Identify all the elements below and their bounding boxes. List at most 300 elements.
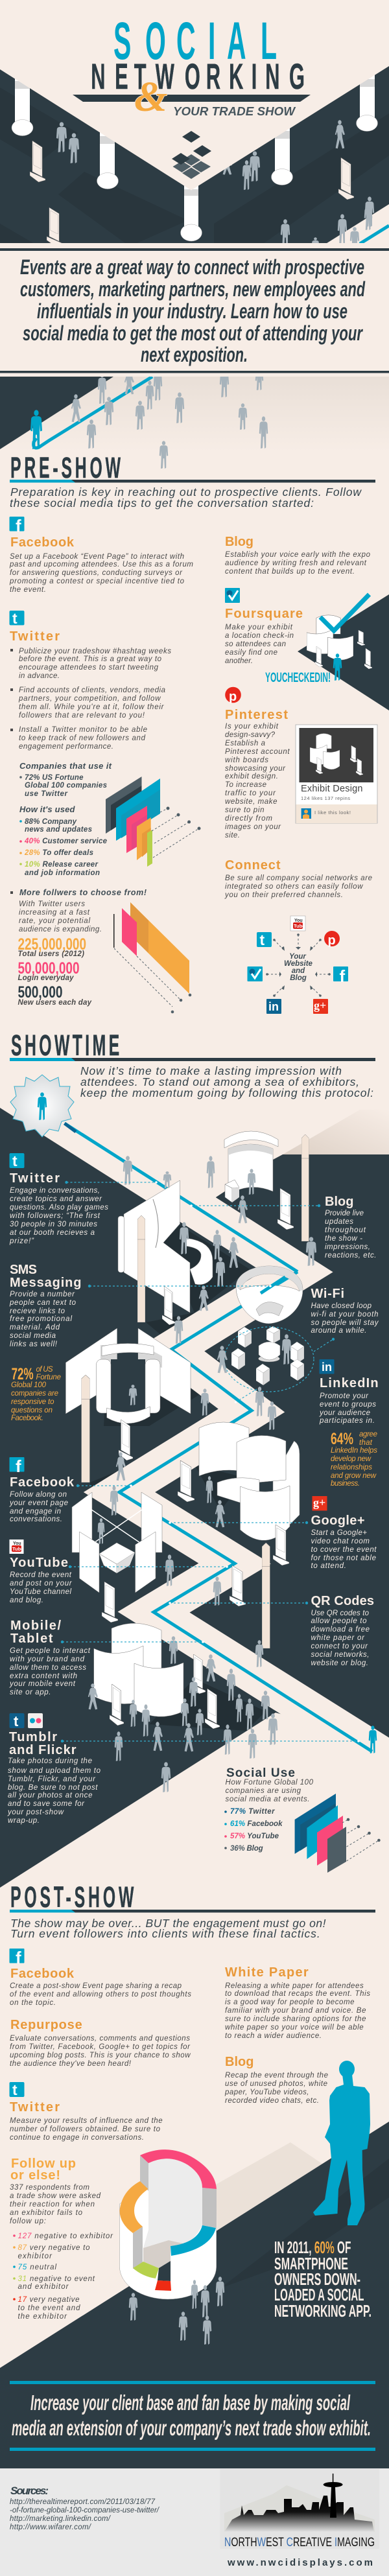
twitter tip: to keep track of new followers and (19, 734, 146, 742)
twitter tip: engagement performance. (19, 743, 113, 751)
social use stats: 77% Twitter (230, 1808, 275, 1816)
footer panel (0, 2468, 389, 2576)
showtime blog callout: the show - (325, 1235, 362, 1243)
social use stats: companies are using (226, 1787, 301, 1795)
icon: linkedin: in (322, 1361, 332, 1374)
icon: youtube showtime: Tube (12, 1546, 23, 1552)
post-show blog tip: paper, YouTube videos, (224, 2089, 309, 2096)
stat: 72 percent (11, 1365, 61, 1422)
pinterest tip: Pinterest account (225, 748, 290, 756)
pinterest tip: images on your (225, 823, 281, 831)
showtime wifi callout: so people will stay (311, 1319, 379, 1327)
pinterest tip: website, make (225, 798, 277, 806)
hero cream ceiling (0, 1, 389, 191)
stat: 72 percent: companies are (11, 1390, 58, 1398)
twitter growth stats: 225,000,000 (18, 935, 86, 954)
showtime mobile callout: Tablet (10, 1632, 53, 1646)
showtime blog callout: Blog (325, 1195, 354, 1209)
repurpose tip (10, 2018, 191, 2068)
twitter growth stats: 500,000 (18, 983, 62, 1001)
foursquare tip: Make your exhibit (225, 624, 293, 631)
how it's used: 88% Company (25, 818, 77, 826)
connect diagram (248, 916, 348, 1014)
stat: 60 percent smartphone owners: IN 2011, 60% OF (274, 2238, 351, 2257)
showtime QR callout: download a free (311, 1626, 370, 1633)
how it's used (19, 804, 108, 877)
showtime tumblr callout: and Flickr (9, 1743, 77, 1757)
pinterest tip: Establish a (225, 740, 265, 747)
showtime SMS callout: recieve links to (10, 1307, 65, 1315)
social use stats: 36% Blog (230, 1845, 263, 1853)
post-show blog tip: recorded video chats, etc. (225, 2097, 319, 2105)
showtime youtube callout: and post on your (10, 1580, 73, 1587)
showtime mobile callout: Get people to interact (10, 1647, 91, 1655)
closing statement (10, 2381, 375, 2451)
connect diagram: t (259, 931, 265, 948)
crowd below band (71, 369, 268, 469)
blog tip: Blog (225, 535, 253, 549)
showtime google plus callout: video chat room (311, 1538, 370, 1545)
logo: diamonds (172, 131, 211, 179)
title: & (134, 73, 167, 121)
stat: 64 percent: agree (359, 1431, 377, 1438)
post-show facebook tip: of the event and allowing others to post thoughts (10, 1991, 191, 1998)
showtime twitter callout (9, 1171, 108, 1245)
showtime intro (80, 1064, 373, 1099)
sources (10, 2485, 160, 2531)
post-show facebook tip: Create a post-show Event page sharing a recap (10, 1982, 182, 1990)
follow up legend: 17 very negative (18, 2296, 79, 2304)
connect diagram: Website (284, 960, 313, 968)
twitter tip: encourage attendees to start tweeting (19, 664, 159, 672)
showtime facebook callout (9, 1475, 75, 1523)
white paper tip: to download that recaps the event. This (225, 1990, 370, 1998)
twitter tip: Find accounts of clients, vendors, media (19, 686, 165, 694)
twitter tip: Install a Twitter monitor to be able (19, 726, 147, 734)
stat: 72 percent: Facebook. (11, 1414, 43, 1422)
pinterest tip: traffic to your (225, 790, 276, 797)
social use stats: 57% YouTube (230, 1832, 279, 1840)
showtime mobile callout: extra content with (10, 1672, 77, 1680)
main booth with curved counter (118, 1180, 213, 1325)
white paper tip: Releasing a white paper for attendees (225, 1982, 364, 1990)
showtime twitter callout: with followers; “The first (10, 1212, 100, 1220)
isometric bar chart: users (113, 902, 191, 1013)
showtime mobile callout (9, 1619, 91, 1696)
follow up text: follow up: (10, 2218, 46, 2225)
wifi ring (236, 1266, 303, 1324)
post-show intro: Turn event followers into clients with these final tactics. (10, 1927, 320, 1940)
follow up legend: 87 very negative to (18, 2244, 90, 2252)
social use stats: 61% Facebook (230, 1820, 283, 1828)
isometric bar chart: social use (295, 1794, 381, 1873)
companies that use it: 72% US Fortune (25, 774, 84, 782)
companies that use it: use Twitter (25, 790, 68, 798)
showtime twitter callout: at our booth recieves a (10, 1229, 95, 1237)
showtime QR callout: white paper or (311, 1634, 365, 1642)
icon: pinterest: p (229, 690, 237, 704)
connect diagram: p (328, 933, 336, 948)
follow up legend: and exhibitor (18, 2283, 69, 2291)
pinterest tip: directly from (225, 815, 272, 823)
showtime facebook callout: Facebook (10, 1475, 75, 1490)
pinterest tip: Pinterest (225, 708, 288, 722)
follow up text: or else! (10, 2168, 60, 2183)
social use stats: How Fortune Global 100 (226, 1779, 314, 1786)
stat: 72 percent: Global 100 (11, 1381, 47, 1389)
stat: 64 percent: relationships (331, 1464, 372, 1471)
heading: Pre-Show: PRE-SHOW (10, 451, 121, 484)
heading: Post-Show: POST-SHOW (10, 1880, 134, 1914)
post-show twitter tip: Twitter (10, 2100, 60, 2114)
blue attendee at end of path (369, 1726, 377, 1753)
showtime tumblr callout: Take photos during the (8, 1757, 92, 1765)
stat: 72 percent: questions on (11, 1407, 53, 1414)
follow up text: a trade show were asked (10, 2192, 101, 2200)
pinterest tip: design-savvy? (225, 731, 276, 739)
repurpose tip: the audience they've been heard! (10, 2060, 132, 2068)
google plus booth (178, 1422, 300, 1648)
showtime youtube callout (10, 1556, 73, 1604)
hero lower right cream floor and blue path (325, 204, 389, 244)
showtime tumblr callout (7, 1730, 101, 1825)
icon: foursquare (225, 588, 240, 603)
showtime mobile callout: allow them to access (10, 1664, 86, 1672)
connect diagram: You (294, 919, 303, 923)
showtime youtube callout: YouTube channel (10, 1588, 71, 1596)
twitter growth stats (10, 888, 147, 1007)
connect tip: Connect (225, 858, 281, 872)
intro band: next exposition. (141, 343, 248, 366)
dotted callout connectors (61, 1181, 360, 1742)
sources: -of-fortune-global-100-companies-use-twitter/ (10, 2507, 160, 2514)
showtime QR callout: QR Codes (311, 1594, 374, 1608)
pre-show intro: Preparation is key in reaching out to prospective clients. Follow (10, 486, 362, 498)
facebook tip: promoting a contest or special incentive tied to (9, 578, 185, 585)
showtime twitter callout: 30 people in 30 minutes (10, 1221, 97, 1228)
showtime mobile callout: site or app. (10, 1689, 51, 1696)
showtime youtube callout: Record the event (10, 1571, 72, 1579)
repurpose tip: Evaluate conversations, comments and questions (10, 2035, 190, 2043)
pre-show intro: these social media tips to get the conversation started: (10, 497, 314, 509)
showtime linkedin callout: Promote your (320, 1392, 369, 1400)
how it's used: How it's used (19, 804, 76, 814)
showtime twitter callout: prize!” (9, 1237, 34, 1245)
showtime youtube callout: and blog. (10, 1597, 43, 1604)
icon: facebook (9, 516, 25, 535)
stat: 72 percent: 72% (12, 1365, 34, 1383)
connect diagram: Blog (290, 974, 307, 982)
icon: twitter (9, 610, 25, 627)
floor shadows (90, 1225, 266, 1731)
twitter growth stats: audience is expanding. (19, 926, 102, 933)
icon: youtube showtime: You (13, 1541, 21, 1546)
connect diagram: g+ (314, 999, 326, 1012)
blog tip (225, 535, 371, 576)
connect tip: integrated so others can easily follow (225, 883, 363, 891)
showtime blog callout: updates (325, 1218, 353, 1226)
connect diagram: Your (289, 953, 306, 961)
foursquare tip: Foursquare (225, 607, 303, 621)
showtime SMS callout: free promotional (10, 1315, 72, 1323)
stat: 72 percent: of US (36, 1366, 53, 1374)
white paper tip: White Paper (225, 1965, 309, 1980)
repurpose tip: upcoming blog posts. This is your chance to show (10, 2052, 191, 2059)
companies that use it: Global 100 companies (25, 782, 107, 790)
connect tip: Be sure all company social networks are (225, 874, 372, 882)
showtime tumblr callout: Tumblr, Flickr, and your (8, 1775, 96, 1783)
white paper tip: is a good way for people to become (225, 1998, 354, 2006)
showtime SMS callout: links as well! (10, 1341, 58, 1348)
sources: Sources: (10, 2485, 49, 2497)
icon: linkedin (319, 1359, 335, 1374)
follow up legend: exhibitor (18, 2253, 53, 2260)
showtime SMS callout: Messaging (10, 1276, 82, 1290)
follow up text: their reaction for when (10, 2201, 95, 2208)
showtime tumblr callout: and to save some for (8, 1800, 85, 1808)
twitter tip: partners, your competition, and follow (18, 695, 161, 703)
follow up legend: 75 neutral (18, 2264, 56, 2271)
showtime twitter callout: Twitter (10, 1171, 60, 1186)
showtime blog callout: throughout (325, 1226, 366, 1234)
post-show twitter tip: number of followers obtained. Be sure to (10, 2125, 161, 2133)
icon: facebook showtime: f (16, 1457, 21, 1476)
showtime attendees (88, 1156, 316, 1792)
post-show blog tip: use of unused photos, white (225, 2080, 327, 2088)
heading: Showtime (10, 1029, 375, 1062)
facebook tip: Facebook (10, 535, 75, 550)
showtime SMS callout: material. Add (10, 1324, 60, 1331)
start badge (10, 1075, 74, 1137)
follow up text: Follow up (11, 2157, 76, 2171)
icon: youtube showtime (9, 1540, 23, 1554)
follow up legend: 127 negative to exhibitor (18, 2232, 113, 2240)
follow up text: 337 respondents from (10, 2184, 89, 2192)
blue attendee (30, 410, 42, 449)
white paper tip: familiar with your brand and voice. Be (225, 2007, 366, 2015)
twitter tip: in advance. (19, 672, 60, 680)
showtime intro: keep the momentum going by following this protocol: (80, 1086, 373, 1099)
showtime QR callout: social networks, (311, 1651, 370, 1659)
stat: 64 percent: develop new (331, 1455, 371, 1463)
showtime google plus callout: Start a Google+ (311, 1529, 367, 1537)
icon: facebook: f (16, 516, 21, 535)
lower hero floor below band (0, 377, 389, 451)
stat: 64 percent: business. (331, 1480, 360, 1488)
connect diagram: Tube (294, 923, 305, 929)
blue journey line (65, 1123, 372, 1751)
pinterest tip: with boards (225, 756, 268, 764)
follow up legend (13, 2232, 113, 2321)
title: NETWORKING (91, 56, 305, 97)
cylinder donut chart (119, 2149, 217, 2299)
repurpose tip: from Twitter, Facebook, Google+ to get topics for (10, 2043, 191, 2051)
icon: google plus: g+ (313, 1496, 325, 1509)
showtime google plus callout: to attend. (311, 1562, 346, 1570)
intro band (0, 243, 389, 377)
blue figure silhouette (313, 2061, 370, 2225)
post-show blog tip: Recap the event through the (225, 2072, 328, 2079)
facebook tip: for answering questions, conducting surveys or (10, 569, 183, 577)
showtime linkedin callout: your audience (319, 1409, 370, 1417)
title: YOUR TRADE SHOW (173, 105, 296, 118)
connect diagram: and (292, 967, 305, 975)
sources: http://marketing.linkedin.com/ (10, 2515, 112, 2523)
showtime tumblr callout: Tumblr (9, 1730, 57, 1744)
hero floor: dark exhibit hall (0, 58, 389, 246)
showtime wifi callout: Have closed loop (311, 1302, 372, 1310)
showtime QR callout: Use QR codes to (311, 1610, 370, 1617)
showtime twitter callout: Engage in conversations, (10, 1187, 100, 1195)
showtime QR callout: website or blog. (311, 1659, 368, 1667)
blog tip: Establish your voice early with the expo (225, 551, 371, 559)
showtime wifi callout: around a while. (311, 1327, 367, 1335)
showtime google plus callout: for those not able (311, 1554, 376, 1562)
sources: http://therealtimereport.com/2011/03/18/77 (10, 2498, 156, 2506)
icon: facebook showtime (9, 1457, 25, 1476)
showtime facebook callout: your event page (9, 1499, 68, 1507)
showtime tumblr callout: all your photos at once (8, 1792, 92, 1799)
post-show blog tip (224, 2055, 328, 2105)
showtime QR callout: allow people to (311, 1617, 367, 1625)
twitter growth stats: More follwers to choose from! (19, 888, 147, 897)
foursquare tip: easily find one (225, 649, 277, 657)
twitter growth stats: 50,000,000 (18, 959, 79, 978)
pinterest tip: site. (225, 832, 240, 839)
cream zigzag aisle (0, 1083, 389, 1776)
pinterest card: I like this look! (314, 810, 351, 815)
showtime intro: attendees. To stand out among a sea of exhibitors, (80, 1075, 359, 1088)
twitter growth stats: Login everyday (18, 974, 74, 982)
showtime blog callout: impressions, (325, 1243, 370, 1251)
stat: 60 percent smartphone owners (274, 2238, 371, 2321)
stat: 64 percent: LinkedIn helps (331, 1447, 377, 1455)
showtime blog callout: Provide live (325, 1210, 364, 1217)
twitter growth stats: New users each day (18, 999, 92, 1007)
showtime wifi callout (311, 1287, 379, 1335)
facebook tip: Set up a Facebook “Event Page” to interact with (10, 553, 184, 561)
wifi lounge seating (224, 1326, 314, 1392)
post-show intro: The show may be over... BUT the engagement must go on! (10, 1917, 326, 1930)
blog tip: audience by writing fresh and relevant (225, 559, 367, 567)
stat: 64 percent (331, 1430, 377, 1488)
heading: Pre-Show (10, 451, 375, 484)
showtime SMS callout: people can text to (9, 1299, 77, 1307)
mobile booth (94, 1623, 220, 1729)
follow up text (10, 2157, 101, 2225)
how it's used: 28% To offer deals (24, 849, 93, 857)
pinterest tip: To increase (225, 781, 266, 789)
twitter tip: Publicize your tradeshow #hashtag weeks (19, 648, 171, 655)
post-show facebook tip: on the topic. (10, 1999, 56, 2007)
stat: 64 percent: 64% (331, 1430, 353, 1448)
how it's used: 10% Release career (25, 861, 99, 869)
icon: twitter post-show: t (12, 2081, 18, 2098)
twitter tip: them all. While you're at it, follow their (19, 703, 165, 711)
twitter tip: followers that are relevant to you! (19, 712, 145, 720)
social use stats: social media at events. (226, 1796, 310, 1803)
blog booth and column (224, 1131, 309, 1241)
hero pillars and banner stands (12, 68, 377, 246)
icon: twitter post-show (9, 2081, 25, 2098)
icon: twitter: t (12, 610, 18, 627)
repurpose tip: Repurpose (10, 2018, 82, 2032)
white paper tip: sure to include sharing options for the (225, 2015, 366, 2023)
pinterest card: 124 likes 137 repins (301, 795, 350, 801)
pinterest tip: Is your exhibit (225, 723, 279, 731)
showtime wifi callout: wi-fi at your booth (311, 1311, 379, 1318)
showtime tumblr callout: blog. Be sure to not post (8, 1784, 98, 1792)
showtime linkedin callout: participates in. (319, 1417, 375, 1425)
white paper tip (225, 1965, 370, 2040)
icon: pinterest (225, 687, 241, 704)
showtime intro: Now it’s time to make a lasting impression with (80, 1064, 342, 1077)
how it's used: news and updates (25, 826, 92, 834)
connect diagram: in (268, 1000, 279, 1013)
showtime twitter callout: questions. Also play games (10, 1204, 108, 1212)
post-show twitter tip (10, 2100, 163, 2142)
twitter growth stats: Total users (2012) (18, 950, 84, 958)
post-show facebook tip (10, 1967, 191, 2007)
showtime facebook callout: and engage in (10, 1508, 61, 1516)
showtime SMS callout (9, 1263, 82, 1348)
icons: tumblr and flickr (9, 1713, 43, 1729)
twitter tip: Twitter (10, 629, 60, 644)
arch booth (65, 1328, 191, 1482)
how it's used: 40% Customer service (24, 837, 108, 845)
showtime tumblr callout: wrap-up. (8, 1817, 40, 1825)
pre-show intro (10, 486, 362, 509)
showtime SMS callout: SMS (10, 1263, 37, 1277)
post-show intro (10, 1917, 326, 1940)
icon: twitter showtime (9, 1153, 25, 1169)
foursquare tip: another. (225, 657, 253, 665)
pinterest card (296, 725, 377, 823)
foursquare tip (225, 607, 303, 665)
showtime blog callout: reactions, etc. (325, 1252, 376, 1259)
showtime wifi callout: Wi-Fi (311, 1287, 344, 1301)
twitter tip (10, 629, 171, 751)
follow up legend: 31 negative to event (18, 2275, 95, 2283)
companies that use it (19, 761, 112, 798)
showtime google plus callout: to cover the event (311, 1546, 377, 1554)
post-show twitter tip: Measure your results of influence and the (10, 2117, 163, 2125)
post-show blog tip: Blog (225, 2055, 254, 2069)
bottom dark floor (0, 2122, 389, 2468)
stat: 64 percent: that (359, 1439, 373, 1447)
stat: 72 percent: responsive to (11, 1398, 54, 1406)
check-in illustration: YOUCHECKEDIN! (265, 670, 331, 685)
website url: www.nwcidisplays.com (227, 2557, 373, 2568)
connect tip: you on their preferred channels. (224, 891, 343, 899)
pinterest tip: exhibit design. (225, 773, 278, 780)
icon: twitter showtime: t (12, 1153, 18, 1169)
showtime tumblr callout: show and upload them to (8, 1767, 101, 1775)
connect tip (224, 858, 372, 899)
pinterest tip: sure to pin (225, 806, 265, 814)
post-show facebook tip: Facebook (10, 1967, 75, 1981)
heading: Post-Show (10, 1880, 375, 1914)
twitter growth stats: increasing at a fast (19, 909, 90, 917)
showtime SMS callout: social media (10, 1332, 56, 1340)
showtime blog callout (325, 1195, 376, 1259)
showtime mobile callout: Mobile/ (10, 1619, 61, 1633)
white paper tip: white paper so your voice will be able (225, 2024, 364, 2032)
facebook tip: past and upcoming attendees. Use this as a forum (9, 561, 193, 568)
stat: 72 percent: Fortune (36, 1374, 61, 1381)
showtime twitter callout: create topics and answer (10, 1195, 102, 1203)
showtime linkedin callout (319, 1376, 379, 1425)
